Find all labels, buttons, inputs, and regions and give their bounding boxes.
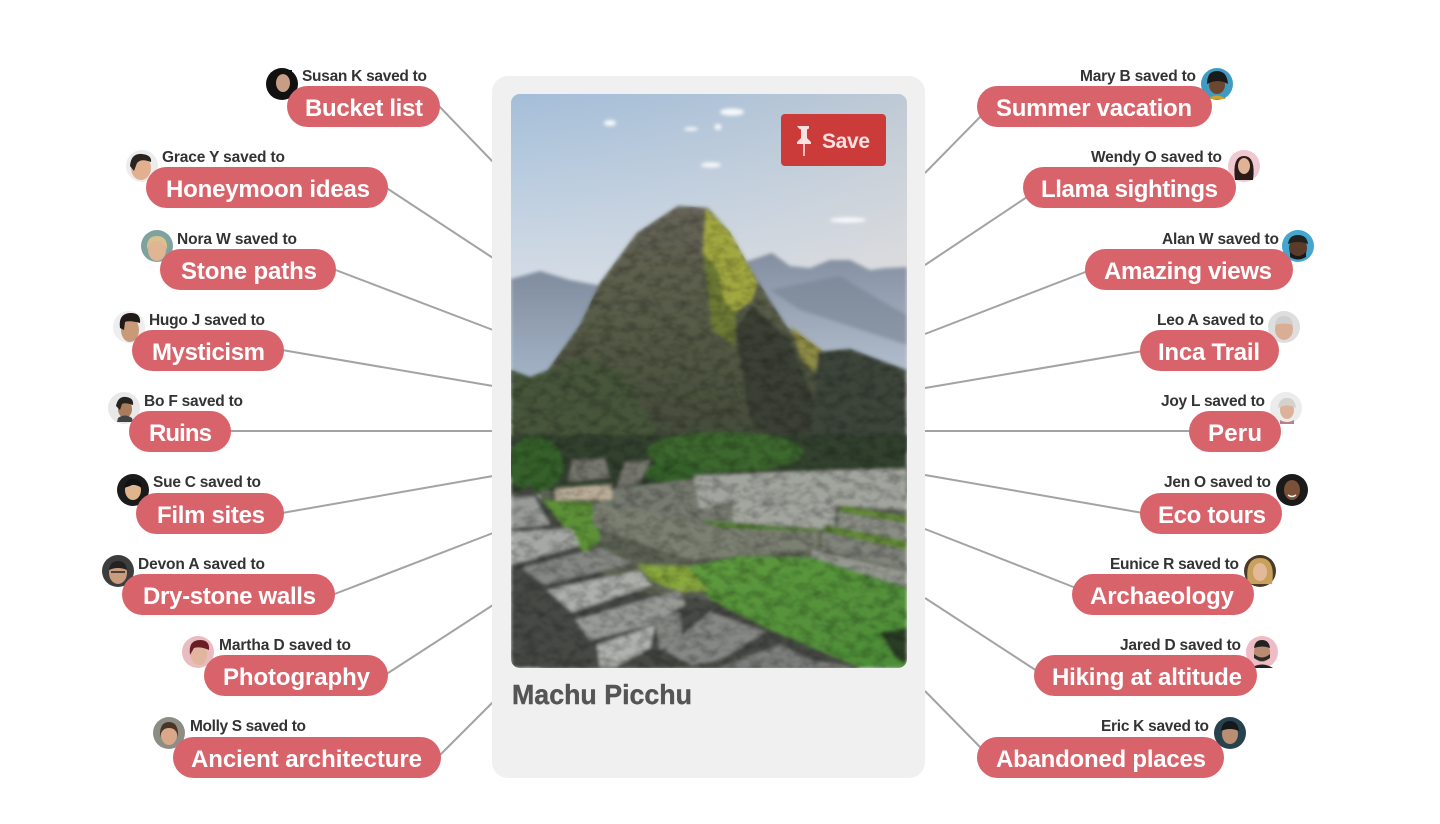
avatar: Molly S xyxy=(153,717,185,749)
avatar: Eunice R xyxy=(1244,555,1276,587)
avatar: Jared D xyxy=(1246,636,1278,668)
ruins terraces xyxy=(540,458,907,668)
avatar: Martha D xyxy=(182,636,214,668)
infographic canvas xyxy=(102,68,1314,778)
avatar: Hugo J xyxy=(113,311,145,343)
avatar: Sue C xyxy=(117,474,149,506)
pill xyxy=(1085,249,1293,290)
pill: Ruins xyxy=(149,420,212,447)
pill xyxy=(1072,574,1254,615)
pill xyxy=(977,86,1212,127)
pill xyxy=(204,655,388,696)
pill: Ancient architecture xyxy=(191,746,422,773)
pill: Peru xyxy=(1208,420,1262,447)
pill xyxy=(1140,493,1282,534)
pill: Inca Trail xyxy=(1158,339,1260,366)
pill: Eco tours xyxy=(1158,502,1266,529)
pill xyxy=(977,737,1224,778)
caption: Devon A saved to xyxy=(138,556,265,573)
caption: Alan W saved to xyxy=(1162,231,1279,248)
pill: Honeymoon ideas xyxy=(166,176,370,203)
pill xyxy=(1023,167,1236,208)
pill: Photography xyxy=(223,664,371,691)
caption: Wendy O saved to xyxy=(1091,149,1222,166)
callout: Ancient architecture xyxy=(153,717,441,778)
callout: Inca Trail xyxy=(1140,311,1300,371)
pill: Abandoned places xyxy=(996,746,1206,773)
pill: Amazing views xyxy=(1104,258,1272,285)
pill: Llama sightings xyxy=(1041,176,1218,203)
pill xyxy=(1140,330,1279,371)
pill xyxy=(1034,655,1257,696)
pill xyxy=(132,330,284,371)
vegetation band xyxy=(507,432,907,495)
callout: Bucket list xyxy=(266,68,440,127)
pill xyxy=(173,737,441,778)
panel: pin card xyxy=(492,76,925,778)
pill: Film sites xyxy=(157,502,265,529)
caption: Grace Y saved to xyxy=(162,149,285,166)
callout: Mysticism xyxy=(113,311,284,371)
pill xyxy=(136,493,284,534)
caption: Sue C saved to xyxy=(153,474,261,491)
caption: Eric K saved to xyxy=(1101,718,1209,735)
mountain peak xyxy=(511,206,907,470)
callout: Eco tours xyxy=(1140,474,1308,534)
callout: Peru xyxy=(1161,392,1302,452)
callout: Ruins xyxy=(108,392,243,452)
caption: Leo A saved to xyxy=(1157,312,1264,329)
avatar: Joy L xyxy=(1270,392,1302,424)
pill: Mysticism xyxy=(152,339,265,366)
callout: Film sites xyxy=(117,474,284,534)
avatar: Grace Y xyxy=(126,150,158,182)
callout: Photography xyxy=(182,636,388,696)
save button xyxy=(781,114,886,166)
caption: Nora W saved to xyxy=(177,231,297,248)
avatar: Jen O xyxy=(1276,474,1308,506)
avatar: Leo A xyxy=(1268,311,1300,343)
caption: Joy L saved to xyxy=(1161,393,1265,410)
pill: Summer vacation xyxy=(996,95,1192,122)
avatar: Bo F xyxy=(108,392,140,424)
avatar: Eric K xyxy=(1214,717,1246,749)
pill: Dry-stone walls xyxy=(143,583,316,610)
callout: Amazing views xyxy=(1085,230,1314,290)
pill xyxy=(160,249,336,290)
pill: Stone paths xyxy=(181,258,317,285)
save label: Save xyxy=(822,130,870,153)
avatar: Devon A xyxy=(102,555,134,587)
connector lines xyxy=(229,103,1192,757)
callout: Stone paths xyxy=(141,230,336,290)
callout: Hiking at altitude xyxy=(1034,636,1278,696)
caption: Eunice R saved to xyxy=(1110,556,1239,573)
callout: Archaeology xyxy=(1072,555,1276,615)
caption: Susan K saved to xyxy=(302,68,427,85)
caption: Mary B saved to xyxy=(1080,68,1196,85)
callout: Honeymoon ideas xyxy=(126,149,388,208)
caption: Jared D saved to xyxy=(1120,637,1241,654)
caption: Bo F saved to xyxy=(144,393,243,410)
pill xyxy=(287,86,440,127)
caption: Hugo J saved to xyxy=(149,312,265,329)
caption: Molly S saved to xyxy=(190,718,306,735)
pill: Hiking at altitude xyxy=(1052,664,1242,691)
pill: Bucket list xyxy=(305,95,423,122)
pill xyxy=(146,167,388,208)
avatar: Mary B xyxy=(1201,68,1233,100)
pill xyxy=(122,574,335,615)
icon: pin xyxy=(797,126,811,156)
avatar: Wendy O xyxy=(1228,150,1260,182)
thatched huts xyxy=(568,458,610,482)
callout: Summer vacation xyxy=(977,68,1233,127)
rock texture xyxy=(511,200,907,668)
stone steps xyxy=(511,485,860,668)
avatar: Alan W xyxy=(1282,230,1314,262)
avatar: Nora W xyxy=(141,230,173,262)
callout: Llama sightings xyxy=(1023,149,1260,208)
caption: Martha D saved to xyxy=(219,637,351,654)
photo: Machu Picchu xyxy=(507,94,907,668)
pill: Archaeology xyxy=(1090,583,1235,610)
caption: Jen O saved to xyxy=(1164,474,1271,491)
pin title: Machu Picchu xyxy=(512,679,692,710)
avatar: Susan K xyxy=(266,68,298,100)
callout: Dry-stone walls xyxy=(102,555,335,615)
pill xyxy=(1189,411,1281,452)
callout: Abandoned places xyxy=(977,717,1246,778)
